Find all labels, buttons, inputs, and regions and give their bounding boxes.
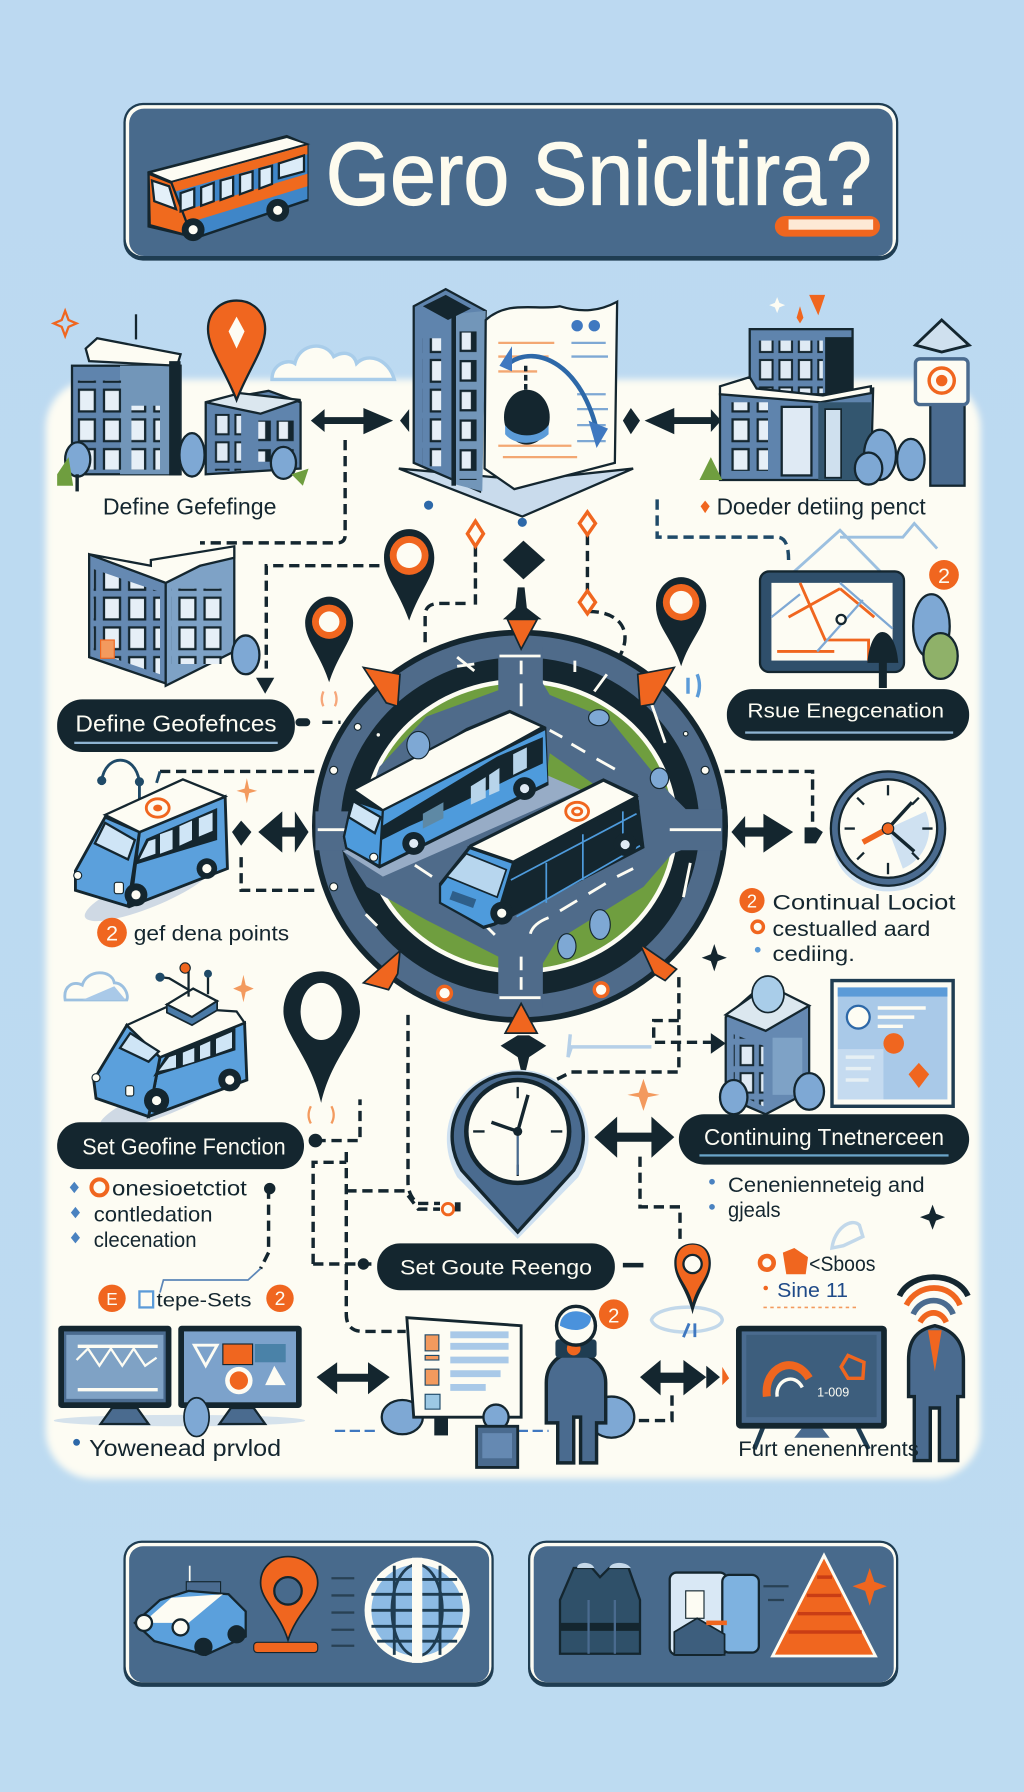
building left middle [89,546,259,686]
pin markers top [305,529,706,706]
icon: sparkle [54,311,77,336]
title banner [123,103,898,261]
pill: set geofence function [57,1122,304,1169]
green wedge between buses [546,753,597,790]
text: continual location: 2 [747,890,757,911]
title text: Gero Snicltira? [326,124,872,224]
icon: orange cone [773,1555,875,1656]
icon: badge 2 [929,560,959,590]
tablet map [760,523,959,688]
label: points [97,918,289,947]
building and screen lower right [720,976,953,1114]
icon: standing person [546,1306,606,1463]
icon: pin 2 [305,597,353,682]
icon: tower [414,289,486,491]
tv: 1-009 [817,1386,849,1400]
icon: info screen [832,981,953,1106]
small orange connector dot [442,1202,461,1215]
person with wifi [899,1277,968,1461]
sparkle [769,297,785,313]
roundabout [312,619,728,1033]
text: bullets left: onesioetctiot [112,1175,247,1200]
connector arrow: tail [568,1034,651,1057]
icon: wifi arcs [899,1277,968,1322]
clock right [831,771,945,891]
text: steps right: Sine 11 [777,1279,848,1302]
icon: person silhouette [867,632,898,688]
text: steps right: <Sboos [809,1251,876,1276]
connector end diamonds [501,541,546,1081]
text: continual location [739,888,955,966]
pill: define geofences [57,699,295,752]
icon: orange flag [797,295,825,323]
label: points: 2 [106,921,118,946]
icon: rocks [560,1563,640,1654]
ring small dots [330,723,709,891]
sparkle [702,944,727,971]
monitors left [54,1326,305,1461]
pill: set geofence function: Set Geofine Fenction [82,1133,286,1159]
arrow: right of roundabout [731,814,823,853]
center monitor and person [335,1299,634,1467]
inner road surface [315,647,722,1008]
icon: badge 2: 2 [608,1304,619,1327]
rocks [407,710,669,959]
label: Yowenead prvlod [89,1435,281,1461]
text: bullets left [70,1175,247,1252]
panel: bottom right [528,1541,898,1687]
icon: office building [89,546,234,686]
icon: building complex [720,329,873,480]
pill: set route: Set Goute Reengo [400,1254,592,1279]
pill: continuing [679,1114,969,1165]
van left [74,760,257,932]
icon: folded map [485,302,617,489]
text: bullets right [709,1172,925,1222]
arrowhead [256,678,274,694]
route pin [651,1243,722,1337]
text: continual location: cestualled aard [773,916,930,941]
van with antenna [65,963,254,1140]
pill: route engagement [727,689,969,741]
arrow: monitors to center [317,1362,390,1394]
tv [736,1326,887,1449]
icon: droplet [184,1398,209,1437]
pill: continuing: Continuing Tnetnerceen [704,1124,944,1150]
panel: bottom left [123,1541,494,1687]
label: further enhancements: Furt enenennrents [738,1436,919,1461]
icon: sparkle [853,1568,887,1606]
text: steps-sets label: 2 [275,1288,285,1310]
text: bullets right: gjeals [728,1197,781,1222]
icon: trees [855,430,925,485]
orange diamond markers [467,512,595,614]
text: steps-sets label [98,1285,294,1312]
text: bullets right: Cenenienneteig and [728,1172,925,1197]
connection dots [424,501,527,527]
icon: tall building [72,314,181,475]
base plate [399,469,633,517]
arrow: left top [311,408,409,434]
icon: orange pin [208,301,265,400]
icon: car [135,1566,246,1656]
icon: large black pin [283,971,360,1123]
cloud [272,346,394,379]
text: steps right [760,1248,876,1307]
icon: badge 2: 2 [938,563,950,588]
icon: tablet [760,571,904,672]
ring lane marks [318,656,721,998]
bus 1 [343,710,549,869]
arrow: center to tv [640,1360,720,1395]
label: Define Gefefinge [103,493,277,519]
text: continual location: cediing. [773,941,855,966]
dashed connectors [160,440,813,1421]
bus shadow [343,775,581,877]
cloud [65,973,127,1000]
arrow: van to roundabout [232,811,309,853]
pill: define geofences: Define Geofefnces [75,710,277,736]
icon: small building [206,391,301,474]
building group: right [699,295,969,519]
building group: define geofencing [54,301,394,519]
icon: trees [65,433,296,479]
icon: monitor 1 [58,1326,171,1424]
text: bullets left: clecenation [94,1227,197,1252]
icon: document monitor [407,1318,521,1435]
bus 2 [439,778,645,929]
arrow: right top [623,408,721,434]
text: continual location: Continual Lociot [773,890,955,915]
icon: pin 3 [656,577,706,666]
orange pill [775,216,880,237]
icon: title bus [147,135,309,241]
icon: bush [913,594,958,679]
pill: set route [377,1243,615,1290]
icon: device cluster [670,1573,759,1655]
clock pin [447,1070,589,1239]
text: bullets left: contledation [94,1202,213,1227]
label: points: gef dena points [134,921,289,946]
icon: small seated figure [477,1405,518,1467]
icon: marker post [915,320,969,486]
panel: main cream area [46,379,981,1479]
orange direction markers [363,619,677,1033]
icon: monitor 2 [178,1326,302,1424]
pill: route engagement: Rsue Enegcenation [747,700,944,723]
icon: pin 1 [384,529,434,621]
icon: small tower [726,976,809,1114]
map tower [399,289,633,527]
icon: bush [232,635,259,674]
rocks [382,1397,634,1438]
icon: globe [365,1558,470,1663]
arrow: clock to pill [594,1117,674,1158]
ring layers [312,630,728,1023]
icon: pin [254,1557,318,1653]
text: steps-sets label: E [106,1289,118,1309]
label: Doeder detiing penct [717,493,926,519]
icon: badge 2 [599,1299,629,1329]
text: steps-sets label: tepe-Sets [157,1289,251,1311]
